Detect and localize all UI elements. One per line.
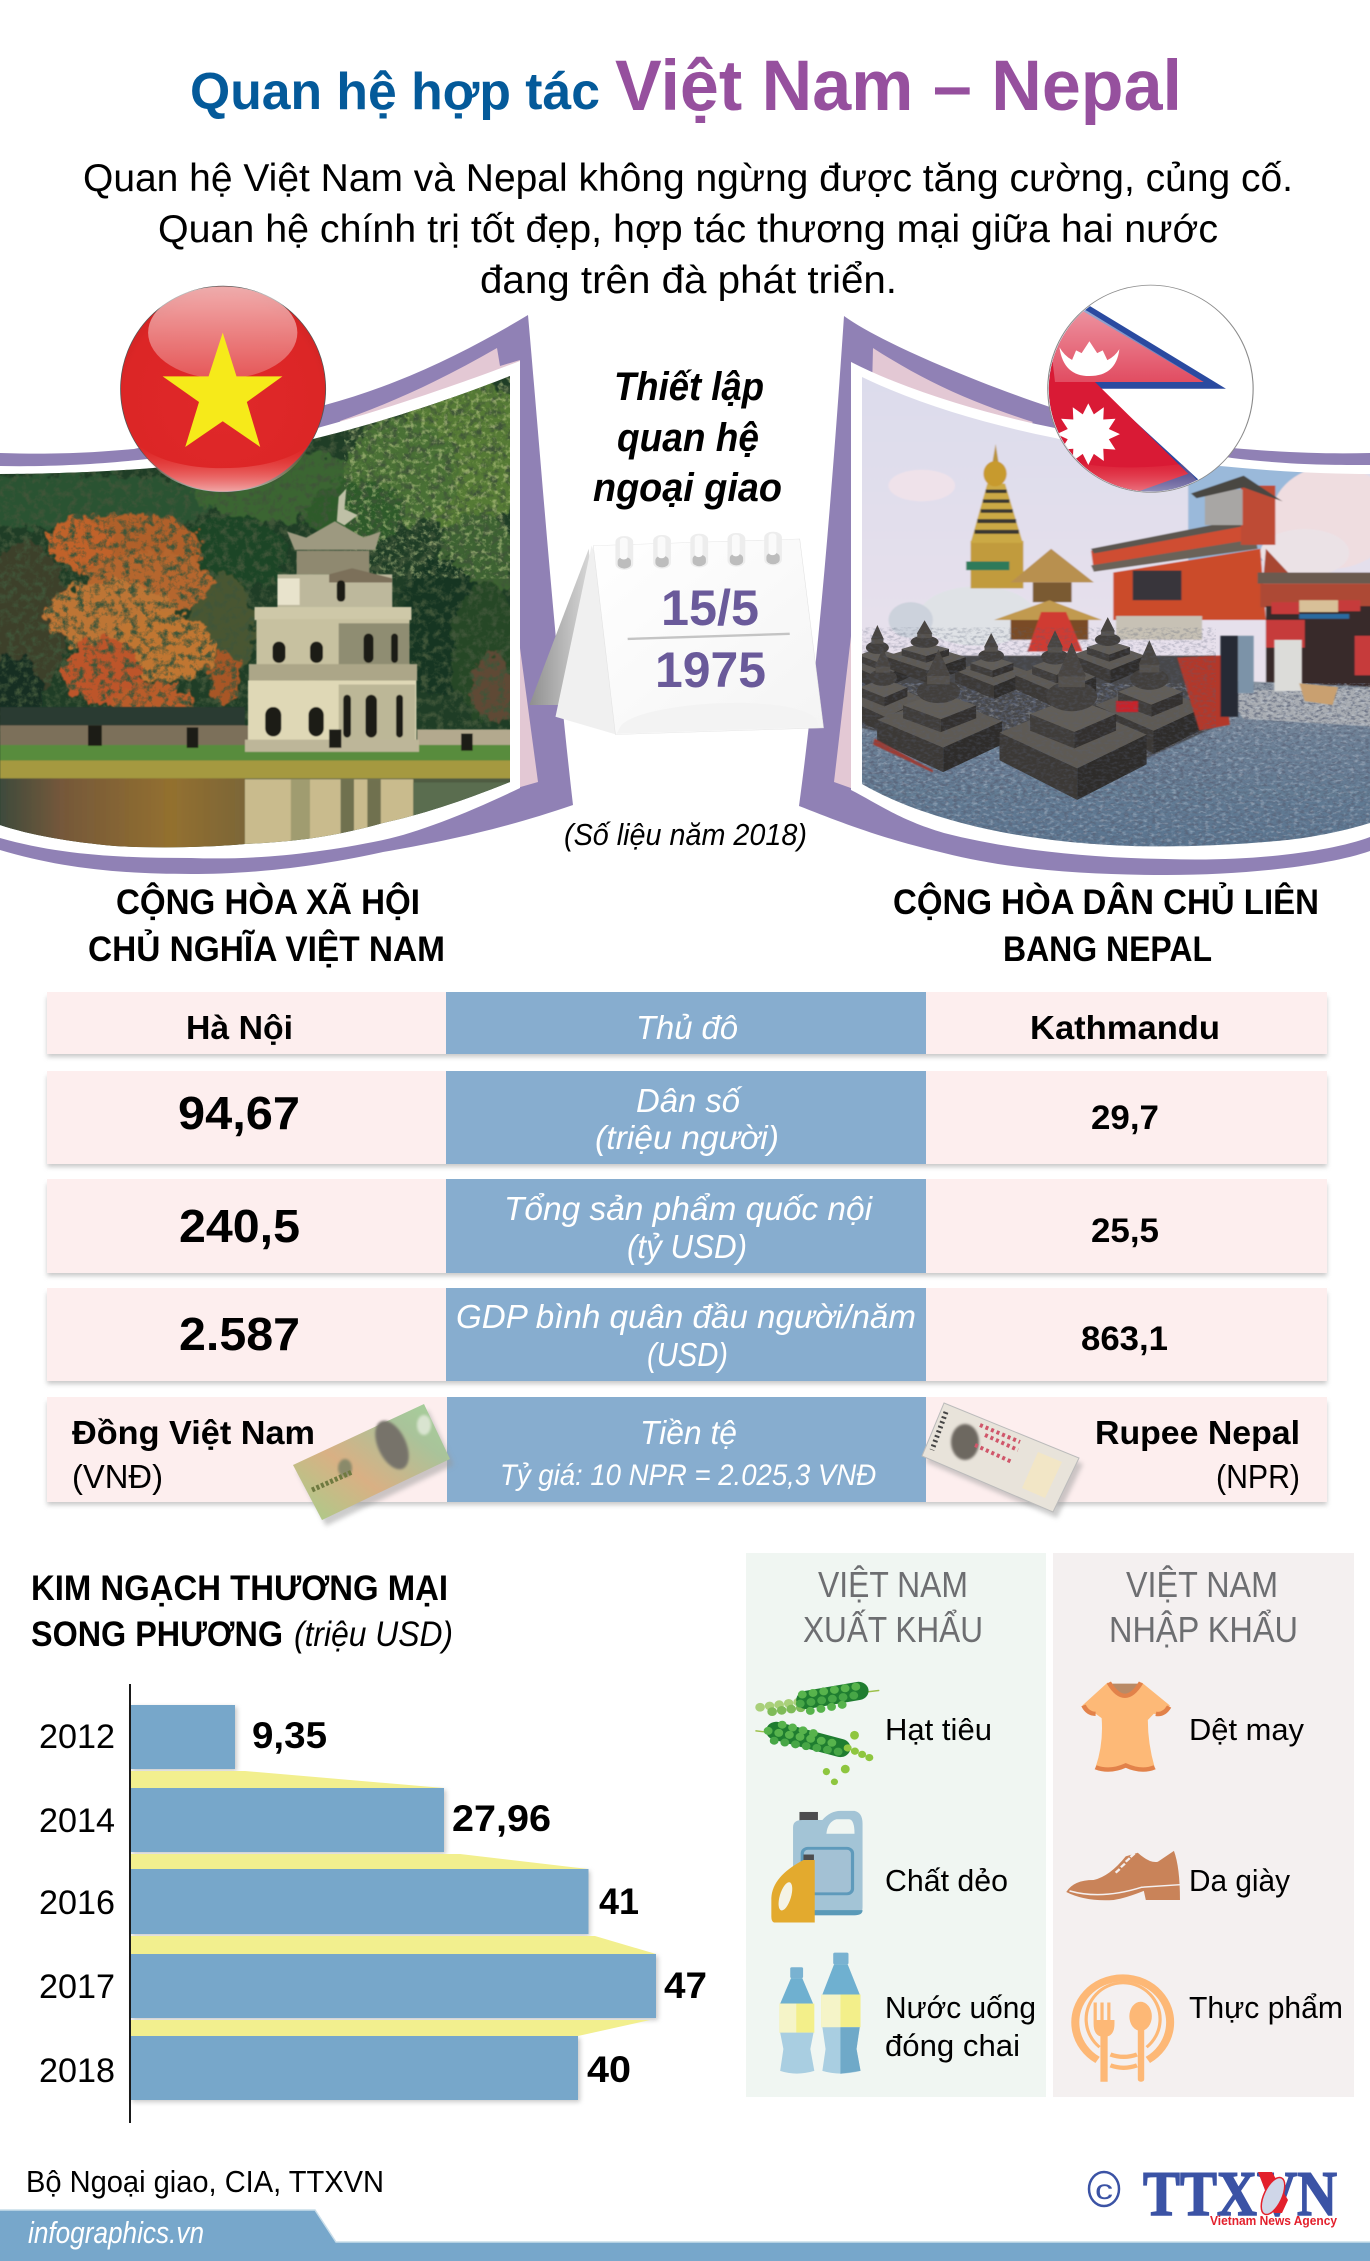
title: Quan hệ hợp tác xyxy=(190,63,600,121)
intro text xyxy=(83,157,1293,302)
icon: t-shirt xyxy=(1082,1683,1170,1770)
bar: 2016: 41 xyxy=(599,1881,639,1922)
icon: pepper xyxy=(756,1685,879,1785)
row: currency: (VNĐ) xyxy=(72,1458,163,1495)
bar: 2017 xyxy=(39,1954,707,2018)
logo: TTXVN: Vietnam News Agency xyxy=(1210,2213,1338,2228)
panel: Vietnam exports: XUẤT KHẨU xyxy=(803,1608,983,1650)
row: currency: (NPR) xyxy=(1216,1458,1300,1495)
source: Bộ Ngoại giao, CIA, TTXVN xyxy=(26,2164,384,2199)
row: GDP: 240,5 xyxy=(179,1200,300,1252)
text: thiết lập quan hệ ngoại giao: quan hệ xyxy=(617,416,759,460)
bar: 2014: 2014 xyxy=(39,1802,115,1840)
intro text: Quan hệ chính trị tốt đẹp, hợp tác thương mại giữa hai nước xyxy=(158,208,1218,251)
intro text: đang trên đà phát triển. xyxy=(480,259,897,302)
bar: 2012: 2012 xyxy=(39,1718,115,1756)
bar chart: bilateral trade by year xyxy=(39,1684,707,2123)
icon: bottled water xyxy=(779,1953,861,2074)
icon: plate with fork and spoon xyxy=(1075,1978,1170,2082)
footer band: infographics.vn xyxy=(28,2215,204,2250)
logo: TTXVN: c xyxy=(1095,2174,1113,2205)
title: Việt Nam – Nepal xyxy=(615,47,1182,126)
row: GDP per capita: GDP bình quân đầu người/năm xyxy=(456,1298,916,1335)
intro text: Quan hệ Việt Nam và Nepal không ngừng được tăng cường, củng cố. xyxy=(83,157,1293,200)
panel: Vietnam imports: Dệt may xyxy=(1189,1712,1304,1747)
panel: Vietnam exports: Chất dẻo xyxy=(885,1863,1008,1898)
icon: plastic jugs xyxy=(771,1811,863,1923)
heading: bilateral trade: (triệu USD) xyxy=(294,1615,453,1654)
row: GDP per capita xyxy=(47,1288,1327,1384)
row: GDP: Tổng sản phẩm quốc nội xyxy=(504,1190,874,1227)
panel: Vietnam photo frame xyxy=(0,315,573,874)
footer band xyxy=(0,2210,1370,2261)
row: capital: Hà Nội xyxy=(186,1009,293,1046)
row: currency: Tỷ giá: 10 NPR = 2.025,3 VNĐ xyxy=(500,1459,876,1492)
icon: Vietnam flag xyxy=(121,286,326,492)
heading: bilateral trade xyxy=(31,1569,453,1654)
bar: 2018: 40 xyxy=(587,2049,631,2090)
heading: Vietnam full name xyxy=(88,882,445,969)
heading: Nepal full name xyxy=(893,882,1319,969)
panel: Vietnam exports: Hạt tiêu xyxy=(885,1712,992,1747)
note: data year: (Số liệu năm 2018) xyxy=(564,817,807,852)
row: population: Dân số xyxy=(636,1082,743,1119)
heading: Vietnam full name: CHỦ NGHĨA VIỆT NAM xyxy=(88,929,445,969)
row: capital xyxy=(47,992,1327,1057)
panel: Vietnam exports: đóng chai xyxy=(885,2028,1020,2063)
row: population: (triệu người) xyxy=(595,1119,779,1156)
text: thiết lập quan hệ ngoại giao: ngoại giao xyxy=(593,466,782,510)
panel: Vietnam imports: Da giày xyxy=(1189,1863,1290,1898)
heading: Nepal full name: BANG NEPAL xyxy=(1003,930,1212,969)
bar: 2018 xyxy=(39,2036,631,2100)
bar: 2012 xyxy=(39,1705,327,1769)
panel: Vietnam imports: Thực phẩm xyxy=(1189,1990,1343,2025)
bar: 2014 xyxy=(39,1788,551,1852)
row: currency: Rupee Nepal xyxy=(1095,1414,1300,1451)
row: population: 94,67 xyxy=(178,1087,300,1139)
heading: Vietnam full name: CỘNG HÒA XÃ HỘI xyxy=(116,882,420,922)
text: thiết lập quan hệ ngoại giao xyxy=(593,365,782,510)
row: population: 29,7 xyxy=(1091,1099,1159,1137)
icon: Vietnamese banknote xyxy=(293,1404,454,1526)
icon: Nepal flag xyxy=(1047,284,1254,493)
panel: Vietnam imports: VIỆT NAM xyxy=(1126,1564,1278,1605)
text: thiết lập quan hệ ngoại giao: Thiết lập xyxy=(614,365,764,409)
row: GDP per capita: 2.587 xyxy=(179,1308,300,1360)
bar: 2012: 9,35 xyxy=(252,1715,327,1756)
heading: bilateral trade: KIM NGẠCH THƯƠNG MẠI xyxy=(31,1569,448,1608)
icon: desk calendar 15/5/1975 xyxy=(529,532,824,735)
panel: Vietnam imports: NHẬP KHẨU xyxy=(1109,1608,1298,1650)
photo: Hoan Kiem lake and Turtle Tower xyxy=(0,362,528,853)
panel: Vietnam imports xyxy=(1053,1553,1354,2097)
bar: 2014: 27,96 xyxy=(452,1798,551,1839)
bar: 2016: 2016 xyxy=(39,1884,115,1922)
row: population xyxy=(47,1071,1327,1167)
panel: Nepal photo frame xyxy=(799,316,1370,875)
panel: Vietnam exports: Nước uống xyxy=(885,1990,1036,2025)
panel: Vietnam exports: VIỆT NAM xyxy=(818,1564,968,1605)
bar: 2018: 2018 xyxy=(39,2052,115,2090)
bar: 2017: 2017 xyxy=(39,1968,115,2006)
row: GDP per capita: 863,1 xyxy=(1081,1320,1168,1358)
row: currency xyxy=(47,1397,1327,1526)
row: capital: Kathmandu xyxy=(1030,1009,1220,1046)
row: GDP: 25,5 xyxy=(1091,1212,1159,1250)
row: currency: Đồng Việt Nam xyxy=(72,1414,315,1451)
row: GDP xyxy=(47,1179,1327,1276)
photo: Swayambhunath stupa, Kathmandu xyxy=(843,371,1370,853)
heading: bilateral trade: SONG PHƯƠNG xyxy=(31,1615,283,1654)
row: GDP per capita: (USD) xyxy=(647,1336,728,1373)
icon: desk calendar 15/5/1975: 15/5 xyxy=(661,580,759,636)
row: GDP: (tỷ USD) xyxy=(627,1228,747,1265)
table: comparison xyxy=(47,992,1327,1526)
icon: Nepalese banknote xyxy=(922,1403,1083,1518)
logo: TTXVN: TTXVN xyxy=(1143,2158,1337,2229)
row: capital: Thủ đô xyxy=(636,1009,738,1046)
row: currency: Tiền tệ xyxy=(640,1414,737,1451)
icon: leather shoe xyxy=(1066,1851,1180,1900)
bar: 2016 xyxy=(39,1869,639,1934)
bar: 2017: 47 xyxy=(664,1965,707,2006)
panel: Vietnam exports xyxy=(746,1553,1046,2097)
heading: Nepal full name: CỘNG HÒA DÂN CHỦ LIÊN xyxy=(893,882,1319,922)
icon: desk calendar 15/5/1975: 1975 xyxy=(655,642,766,698)
title xyxy=(190,47,1182,126)
